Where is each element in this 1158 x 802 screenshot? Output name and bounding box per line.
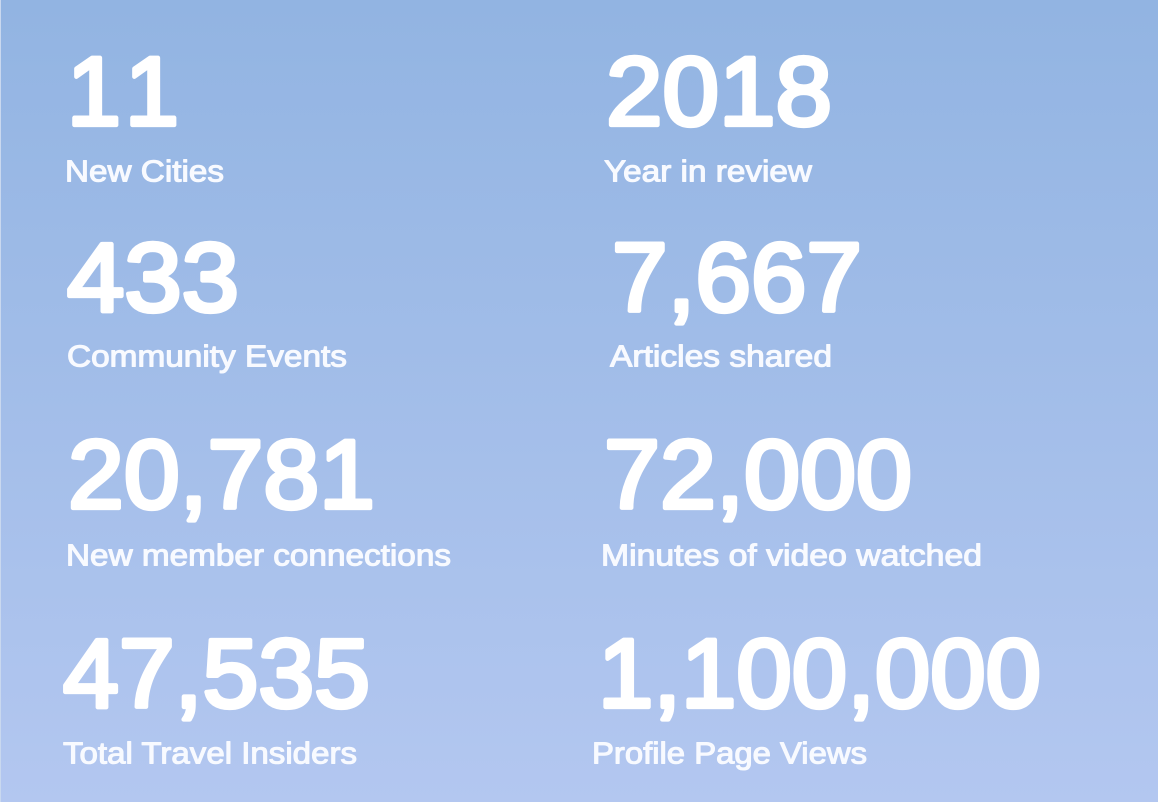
stat: new member connections	[66, 420, 451, 572]
stat: new cities: 11	[67, 37, 179, 146]
stat: minutes of video watched	[601, 420, 982, 572]
stat: articles shared: 7,667	[612, 223, 862, 332]
stat: minutes of video watched: Minutes of video watched	[601, 538, 982, 572]
stat: profile page views: Profile Page Views	[592, 736, 867, 770]
stat: profile page views	[592, 619, 1041, 770]
stat: community events: Community Events	[67, 340, 347, 374]
stat: minutes of video watched: 72,000	[604, 420, 912, 529]
stat: profile page views: 1,100,000	[598, 619, 1041, 728]
stat: community events: 433	[67, 223, 239, 332]
stat: total travel insiders: Total Travel Insiders	[63, 736, 357, 770]
stat: new cities: New Cities	[65, 154, 224, 188]
stat: year in review	[604, 37, 832, 188]
stat: total travel insiders: 47,535	[63, 619, 370, 728]
stat: new member connections: 20,781	[68, 420, 375, 529]
stat: articles shared: Articles shared	[610, 340, 832, 374]
stat: total travel insiders	[63, 619, 370, 770]
stat: new member connections: New member connections	[66, 538, 451, 572]
stat: community events	[67, 223, 347, 374]
stat: new cities	[65, 37, 224, 188]
stat: year in review: 2018	[606, 37, 832, 146]
stat: articles shared	[610, 223, 862, 374]
stat: year in review: Year in review	[604, 154, 813, 188]
